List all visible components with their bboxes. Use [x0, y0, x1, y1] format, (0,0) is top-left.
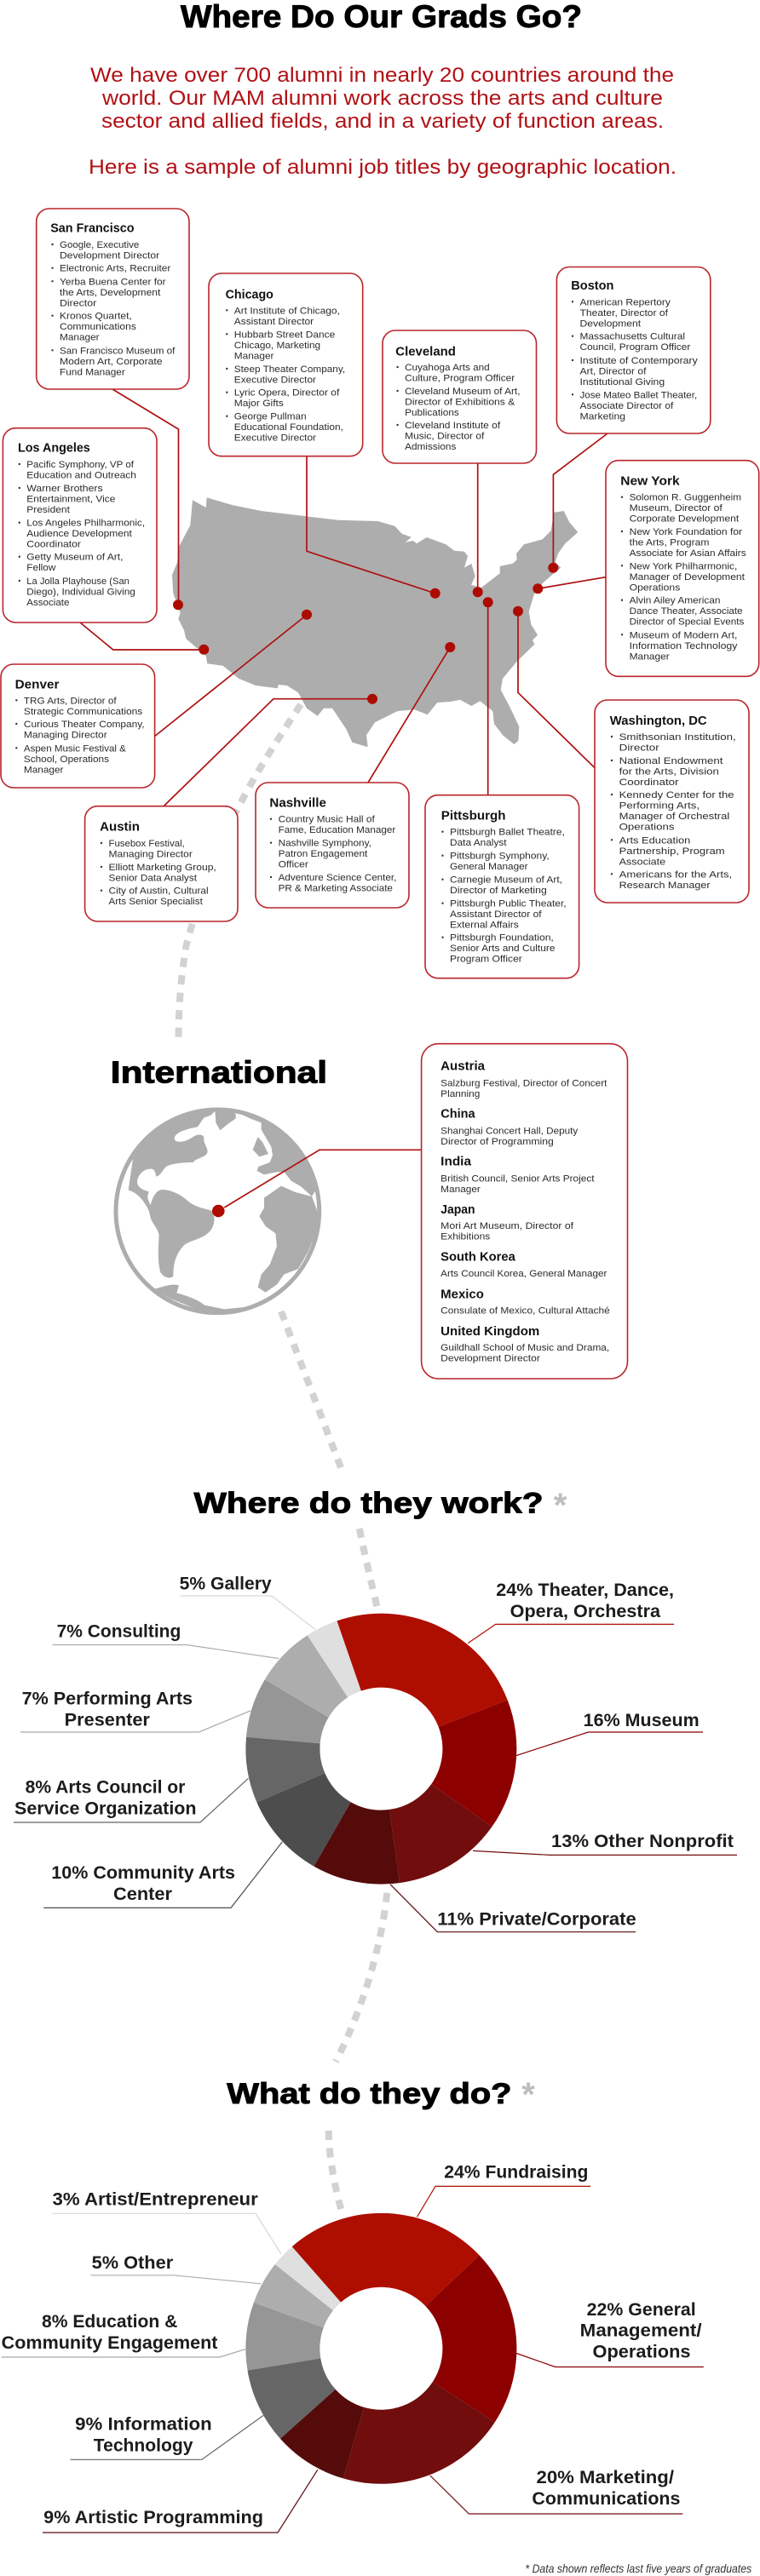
panel: International alumni: Arts Council Korea, General Manager: [440, 1269, 607, 1279]
connector: International: [212, 1150, 422, 1217]
label: 7% Consulting: [53, 1622, 279, 1659]
label: 24% Theater, Dance, Opera, Orchestra: [468, 1581, 674, 1644]
panel: Los Angeles: Pacific Symphony, VP of: [26, 460, 135, 470]
label: 7% Performing Arts Presenter: Presenter: [65, 1710, 150, 1730]
label: 13% Other Nonprofit: 13% Other Nonprofit: [551, 1832, 734, 1851]
panel: New York: Director of Special Events: [630, 617, 745, 628]
panel: Pittsburgh: Pittsburgh Ballet Theatre,: [450, 828, 565, 838]
heading: What do they do?: [227, 2076, 535, 2114]
heading: International: International: [111, 1055, 327, 1090]
panel: Washington, DC: Partnership, Program: [619, 846, 725, 857]
panel: Pittsburgh: Program Officer: [450, 955, 522, 965]
slice: 24% Theater, Dance, Opera, Orchestra: [337, 1614, 508, 1727]
label: 9% Artistic Programming: [43, 2470, 318, 2533]
label: 24% Fundraising: [417, 2162, 590, 2217]
slice: 10% Community Arts Center: [256, 1773, 351, 1867]
panel: New York: New York Philharmonic,: [630, 561, 737, 571]
panel: Boston: Theater, Director of: [579, 308, 669, 318]
panel: Boston: Jose Mateo Ballet Theater,: [579, 390, 697, 400]
label: 11% Private/Corporate: 11% Private/Corporate: [437, 1910, 636, 1930]
panel: Denver: Aspen Music Festival &: [24, 743, 126, 754]
panel: Los Angeles: Audience Development: [26, 529, 133, 539]
connector: Austin: [164, 694, 377, 806]
label: 13% Other Nonprofit: [473, 1832, 737, 1855]
panel: International alumni: [422, 1044, 627, 1379]
slice: 8% Education & Community Engagement: [245, 2303, 324, 2371]
label: 7% Performing Arts Presenter: 7% Performing Arts: [22, 1690, 193, 1709]
panel: International alumni: India: [440, 1156, 472, 1169]
label: 5% Gallery: 5% Gallery: [180, 1574, 272, 1594]
panel: Austin: [85, 806, 238, 921]
panel: Los Angeles: La Jolla Playhouse (San: [26, 577, 130, 587]
label: 8% Arts Council or Service Organization: 8% Arts Council or: [26, 1778, 185, 1798]
label: 24% Fundraising: 24% Fundraising: [444, 2162, 588, 2182]
donut chart: where do they work: [245, 1614, 516, 1885]
panel: Pittsburgh: Pittsburgh Symphony,: [450, 852, 550, 862]
panel: Nashville: Officer: [279, 860, 308, 870]
panel: Chicago: Hubbarb Street Dance: [234, 330, 335, 340]
panel: Cleveland: Culture, Program Officer: [405, 373, 515, 383]
panel: Los Angeles: Fellow: [26, 563, 56, 573]
panel: Denver: Strategic Communications: [24, 707, 143, 717]
panel: Austin: Fusebox Festival,: [109, 839, 185, 849]
panel: San Francisco: Communications: [60, 322, 136, 332]
slice: 9% Artistic Programming: [280, 2390, 364, 2478]
label: 24% Theater, Dance, Opera, Orchestra: Opera, Orchestra: [510, 1602, 660, 1621]
panel: Denver: Managing Director: [24, 731, 107, 741]
panel: Washington, DC: Director: [619, 743, 659, 753]
slice: 3% Artist/Entrepreneur: [275, 2246, 341, 2310]
panel: Chicago: Chicago, Marketing: [234, 341, 320, 351]
intro text: sector and allied fields, and in a variety of function areas.: [101, 110, 664, 133]
label: 16% Museum: [516, 1711, 703, 1756]
panel: Cleveland: Cleveland Museum of Art,: [405, 387, 520, 397]
panel: International alumni: Director of Programming: [440, 1137, 554, 1147]
panel: San Francisco: the Arts, Development: [60, 288, 161, 298]
panel: Los Angeles: Associate: [26, 598, 69, 608]
heading: Where do they work?: Where do they work?: [194, 1487, 543, 1519]
dashed path: map to International: [179, 704, 301, 1040]
panel: Boston: Art, Director of: [579, 366, 647, 376]
panel: Chicago: Executive Director: [234, 433, 316, 444]
label: 22% General Management/Operations: Operations: [593, 2343, 690, 2362]
label: 7% Performing Arts Presenter: [20, 1690, 250, 1732]
label: 9% Information Technology: [70, 2415, 263, 2459]
panel: Washington, DC: Manager of Orchestral: [619, 812, 729, 822]
panel: New York: Manager: [630, 651, 670, 662]
panel: International alumni: China: [440, 1108, 476, 1122]
panel: Cleveland: Cuyahoga Arts and: [405, 363, 490, 373]
panel: Austin: Elliott Marketing Group,: [109, 863, 216, 873]
panel: Pittsburgh: External Affairs: [450, 921, 519, 931]
intro text: [89, 64, 677, 179]
label: 5% Gallery: [180, 1574, 315, 1630]
panel: Denver: Denver: [15, 678, 60, 691]
panel: Boston: Institute of Contemporary: [579, 356, 698, 366]
slice: 9% Information Technology: [247, 2358, 336, 2439]
panel: New York: Museum, Director of: [630, 503, 723, 513]
slice: 13% Other Nonprofit: [389, 1784, 492, 1883]
panel: Los Angeles: Entertainment, Vice: [26, 494, 115, 504]
label: 3% Artist/Entrepreneur: [53, 2189, 281, 2254]
panel: Washington, DC: Coordinator: [619, 777, 679, 788]
icon: globe: [116, 1110, 320, 1313]
panel: Los Angeles: Education and Outreach: [26, 470, 136, 480]
panel: Denver: [1, 664, 155, 788]
panel: Los Angeles: Los Angeles Philharmonic,: [26, 519, 145, 529]
panel: International alumni: British Council, Senior Arts Project: [440, 1173, 595, 1184]
panel: Los Angeles: President: [26, 505, 71, 515]
panel: San Francisco: Director: [60, 298, 96, 308]
heading: What do they do?: What do they do?: [227, 2078, 511, 2110]
panel: Pittsburgh: Pittsburgh Foundation,: [450, 933, 554, 944]
panel: San Francisco: Yerba Buena Center for: [60, 277, 166, 287]
label: 24% Theater, Dance, Opera, Orchestra: 24% Theater, Dance,: [496, 1581, 674, 1600]
dashed path: into second chart: [329, 2131, 342, 2211]
panel: Washington, DC: Americans for the Arts,: [619, 869, 732, 880]
panel: Nashville: Country Music Hall of: [279, 815, 376, 825]
slice: 16% Museum: [431, 1700, 516, 1827]
panel: New York: New York: [620, 474, 681, 488]
panel: Chicago: Chicago: [226, 289, 273, 302]
panel: Nashville: Patron Engagement: [279, 849, 368, 859]
panel: Washington, DC: Associate: [619, 857, 665, 867]
panel: San Francisco: Google, Executive: [60, 240, 139, 250]
panel: New York: Dance Theater, Associate: [630, 606, 743, 617]
slice: 5% Other: [254, 2264, 333, 2327]
label: 9% Information Technology: 9% Information: [75, 2415, 212, 2435]
label: 7% Consulting: 7% Consulting: [57, 1622, 181, 1642]
dashed path: globe to first chart: [281, 1311, 387, 2062]
label: 3% Artist/Entrepreneur: 3% Artist/Entrepreneur: [53, 2189, 258, 2209]
panel: International alumni: South Korea: [440, 1251, 516, 1265]
panel: New York: Museum of Modern Art,: [630, 630, 737, 640]
panel: San Francisco: San Francisco Museum of: [60, 346, 176, 356]
label: 8% Education & Community Engagement: [2, 2312, 245, 2357]
slice: 11% Private/Corporate: [314, 1802, 400, 1885]
panel: San Francisco: Kronos Quartet,: [60, 312, 132, 322]
panel: San Francisco: [37, 209, 189, 389]
connector: Nashville: [368, 642, 455, 783]
panel: Austin: Senior Data Analyst: [109, 874, 198, 884]
label: 20% Marketing/Communications: [430, 2468, 682, 2514]
heading: What do they do?: *: [521, 2076, 535, 2114]
panel: Austin: City of Austin, Cultural: [109, 886, 209, 897]
panel: San Francisco: Manager: [60, 333, 100, 343]
label: 11% Private/Corporate: [390, 1885, 636, 1932]
panel: Austin: Managing Director: [109, 850, 193, 860]
panel: Chicago: Executive Director: [234, 375, 316, 385]
panel: Nashville: Nashville: [269, 796, 326, 810]
panel: Washington, DC: Smithsonian Institution,: [619, 732, 736, 743]
panel: Los Angeles: Getty Museum of Art,: [26, 553, 123, 563]
connector: Chicago: [307, 456, 440, 599]
panel: International alumni: Japan: [440, 1203, 475, 1217]
panel: Chicago: [209, 273, 363, 456]
panel: International alumni: Exhibitions: [440, 1231, 491, 1242]
panel: New York: Alvin Ailey American: [630, 596, 721, 606]
panel: Washington, DC: Arts Education: [619, 835, 690, 846]
panel: San Francisco: San Francisco: [50, 222, 135, 236]
slice: 7% Consulting: [265, 1635, 348, 1718]
panel: Boston: Development: [579, 318, 642, 329]
connector: Cleveland: [473, 463, 483, 597]
panel: Chicago: Major Gifts: [234, 399, 284, 409]
label: 8% Education & Community Engagement: Community Engagement: [2, 2333, 218, 2353]
panel: Nashville: PR & Marketing Associate: [279, 884, 393, 894]
connector: Boston: [548, 433, 607, 573]
panel: Boston: Massachusetts Cultural: [579, 332, 685, 342]
panel: Pittsburgh: Carnegie Museum of Art,: [450, 875, 562, 886]
panel: Cleveland: Cleveland Institute of: [405, 421, 501, 431]
panel: International alumni: Guildhall School of Music and Drama,: [440, 1343, 609, 1353]
donut chart: what do they do: [245, 2213, 516, 2484]
intro text: We have over 700 alumni in nearly 20 countries around the: [90, 64, 674, 87]
panel: Austin: Arts Senior Specialist: [109, 897, 204, 907]
panel: Cleveland: Music, Director of: [405, 431, 485, 441]
panel: San Francisco: Modern Art, Corporate: [60, 357, 163, 367]
panel: Los Angeles: Coordinator: [26, 540, 81, 550]
heading: Where do they work?: *: [554, 1487, 567, 1524]
panel: Boston: Institutional Giving: [579, 377, 665, 387]
panel: Pittsburgh: Pittsburgh Public Theater,: [450, 899, 567, 909]
panel: International alumni: Mexico: [440, 1288, 484, 1301]
connector: Pittsburgh: [483, 597, 493, 795]
label: 20% Marketing/Communications: 20% Marketing/: [537, 2468, 674, 2487]
panel: Chicago: Steep Theater Company,: [234, 364, 345, 375]
panel: Denver: TRG Arts, Director of: [24, 696, 117, 706]
panel: International alumni: United Kingdom: [440, 1325, 539, 1339]
panel: Pittsburgh: [425, 795, 579, 978]
panel: Washington, DC: Research Manager: [619, 881, 711, 891]
panel: Chicago: Art Institute of Chicago,: [234, 306, 340, 316]
panel: Washington, DC: Performing Arts,: [619, 800, 700, 811]
slice: 20% Marketing/Communications: [343, 2382, 495, 2484]
label: 20% Marketing/Communications: Communications: [532, 2489, 680, 2509]
label: 10% Community Arts Center: Center: [113, 1885, 172, 1904]
panel: Denver: Manager: [24, 765, 64, 775]
panel: Denver: Curious Theater Company,: [24, 720, 145, 730]
label: 8% Arts Council or Service Organization: Service Organization: [14, 1799, 197, 1819]
panel: Los Angeles: Los Angeles: [18, 442, 90, 456]
panel: New York: the Arts, Program: [630, 538, 709, 548]
panel: International alumni: Development Director: [440, 1354, 540, 1364]
panel: International alumni: Consulate of Mexico, Cultural Attaché: [440, 1306, 610, 1317]
panel: New York: [606, 461, 759, 676]
panel: Boston: American Repertory: [579, 297, 671, 307]
panel: San Francisco: Fund Manager: [60, 367, 125, 377]
panel: Pittsburgh: General Manager: [450, 862, 528, 872]
connector: Washington, DC: [513, 606, 595, 768]
panel: Chicago: Manager: [234, 351, 274, 361]
label: 8% Arts Council or Service Organization: [14, 1778, 248, 1822]
panel: New York: Corporate Development: [630, 514, 740, 525]
label: 5% Other: [90, 2253, 261, 2284]
panel: Cleveland: Cleveland: [395, 345, 456, 359]
heading: Where do they work?: [194, 1487, 567, 1524]
panel: New York: Associate for Asian Affairs: [630, 548, 746, 559]
intro text: Here is a sample of alumni job titles by geographic location.: [89, 156, 677, 179]
panel: International alumni: Austria: [440, 1060, 486, 1074]
panel: Cleveland: Director of Exhibitions &: [405, 397, 515, 407]
panel: Chicago: Assistant Director: [234, 317, 314, 327]
panel: Los Angeles: [3, 428, 157, 622]
panel: New York: New York Foundation for: [630, 527, 742, 537]
panel: Boston: Associate Director of: [579, 401, 674, 411]
panel: International alumni: Shanghai Concert Hall, Deputy: [440, 1126, 579, 1136]
panel: New York: Information Technology: [630, 641, 738, 651]
panel: Cleveland: Admissions: [405, 442, 457, 452]
panel: Boston: Council, Program Officer: [579, 342, 691, 353]
panel: International alumni: Planning: [440, 1089, 480, 1099]
panel: New York: Operations: [630, 582, 681, 593]
panel: Denver: School, Operations: [24, 754, 109, 765]
panel: Boston: Boston: [571, 279, 613, 293]
panel: Cleveland: Publications: [405, 408, 459, 418]
panel: Los Angeles: Diego), Individual Giving: [26, 588, 135, 598]
panel: Pittsburgh: Pittsburgh: [441, 809, 506, 823]
slice: 7% Performing Arts Presenter: [246, 1679, 329, 1743]
panel: Washington, DC: Kennedy Center for the: [619, 790, 734, 800]
panel: Washington, DC: National Endowment: [619, 756, 723, 766]
panel: Austin: Austin: [100, 821, 140, 835]
connector: Los Angeles: [80, 622, 209, 655]
panel: Pittsburgh: Assistant Director of: [450, 909, 542, 920]
slice: 8% Arts Council or Service Organization: [245, 1737, 325, 1802]
connector: New York: [533, 577, 606, 594]
panel: Boston: Marketing: [579, 411, 625, 422]
intro text: world. Our MAM alumni work across the arts and culture: [101, 87, 663, 110]
slice: 5% Gallery: [308, 1621, 361, 1697]
panel: Cleveland: [383, 330, 537, 463]
panel: Nashville: [256, 783, 409, 908]
label: 9% Artistic Programming: 9% Artistic Programming: [43, 2508, 263, 2527]
label: 22% General Management/Operations: 22% General: [587, 2300, 696, 2320]
label: 8% Education & Community Engagement: 8% Education &: [42, 2312, 177, 2332]
label: 5% Other: 5% Other: [92, 2253, 173, 2273]
panel: Chicago: George Pullman: [234, 412, 307, 422]
connector: San Francisco: [112, 389, 183, 610]
title: Where Do Our Grads Go?: [181, 0, 582, 34]
panel: Pittsburgh: Senior Arts and Culture: [450, 944, 556, 954]
panel: Washington, DC: [595, 700, 749, 903]
panel: International alumni: Manager: [440, 1185, 481, 1195]
panel: Pittsburgh: Data Analyst: [450, 838, 507, 848]
label: 10% Community Arts Center: [43, 1842, 282, 1908]
panel: Pittsburgh: Director of Marketing: [450, 886, 547, 896]
label: 9% Information Technology: Technology: [94, 2435, 193, 2455]
panel: Washington, DC: Operations: [619, 823, 675, 833]
label: 22% General Management/Operations: [516, 2300, 704, 2367]
panel: International alumni: Mori Art Museum, Director of: [440, 1221, 574, 1231]
label: 10% Community Arts Center: 10% Community Arts: [51, 1863, 235, 1883]
panel: Los Angeles: Warner Brothers: [26, 484, 103, 494]
panel: Nashville: Fame, Education Manager: [279, 825, 396, 835]
panel: San Francisco: Electronic Arts, Recruiter: [60, 264, 171, 274]
panel: San Francisco: Development Director: [60, 251, 159, 261]
panel: International alumni: Salzburg Festival, Director of Concert: [440, 1078, 607, 1088]
slice: 24% Fundraising: [292, 2213, 479, 2306]
label: 16% Museum: 16% Museum: [584, 1711, 700, 1730]
panel: Chicago: Educational Foundation,: [234, 422, 343, 433]
map of the United States: [172, 497, 578, 747]
slice: 22% General Management/Operations: [426, 2255, 516, 2422]
panel: Nashville: Adventure Science Center,: [279, 873, 396, 883]
panel: Washington, DC: for the Arts, Division: [619, 766, 719, 777]
panel: Boston: [556, 267, 711, 433]
panel: Chicago: Lyric Opera, Director of: [234, 388, 340, 399]
panel: New York: Manager of Development: [630, 572, 746, 582]
panel: New York: Solomon R. Guggenheim: [630, 493, 741, 503]
panel: Washington, DC: Washington, DC: [610, 714, 707, 728]
connector: Denver: [154, 610, 312, 737]
panel: Nashville: Nashville Symphony,: [279, 839, 371, 849]
label: 22% General Management/Operations: Management/: [580, 2321, 702, 2341]
